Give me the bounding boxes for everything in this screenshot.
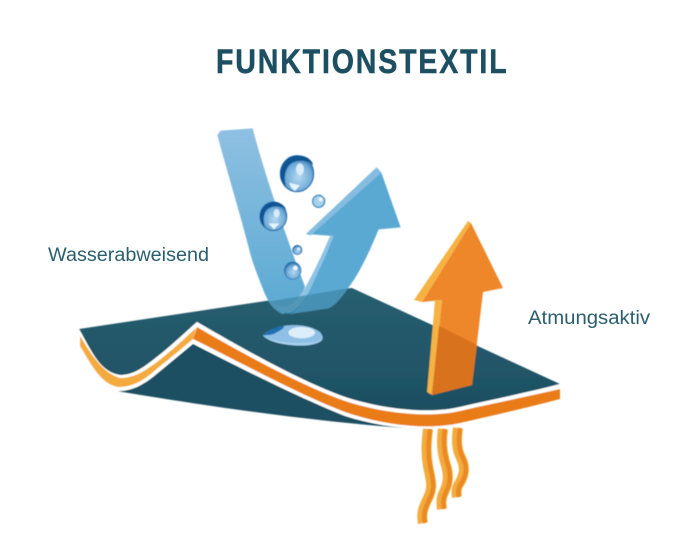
illustration: fabric and arrows: [79, 128, 560, 523]
large drop: [280, 156, 314, 192]
lower fabric sheet: [117, 344, 422, 429]
fabric layer: yellow band: [80, 328, 196, 387]
arrow shaded overlap on fabric: [432, 326, 477, 395]
upper fabric sheet: [79, 288, 560, 410]
overlap on fabric: [268, 288, 352, 314]
arrow tail: [217, 128, 305, 314]
title: FUNKTIONSTEXTIL: [216, 43, 507, 81]
label: Wasserabweisend: Wasserabweisend: [48, 245, 209, 266]
fabric layer: white membrane: [79, 322, 560, 428]
water drops: [260, 156, 325, 346]
fabric layer: orange band: [193, 327, 560, 426]
flattened drop on fabric: [263, 325, 323, 346]
arrow head and shaft: [290, 167, 401, 314]
steam wavy lines: [422, 428, 466, 523]
orange arrow: [414, 221, 503, 395]
label: Atmungsaktiv: Atmungsaktiv: [528, 308, 651, 329]
small drops: [313, 195, 325, 207]
medium drop: [260, 202, 287, 231]
blue arrow: [217, 128, 401, 314]
